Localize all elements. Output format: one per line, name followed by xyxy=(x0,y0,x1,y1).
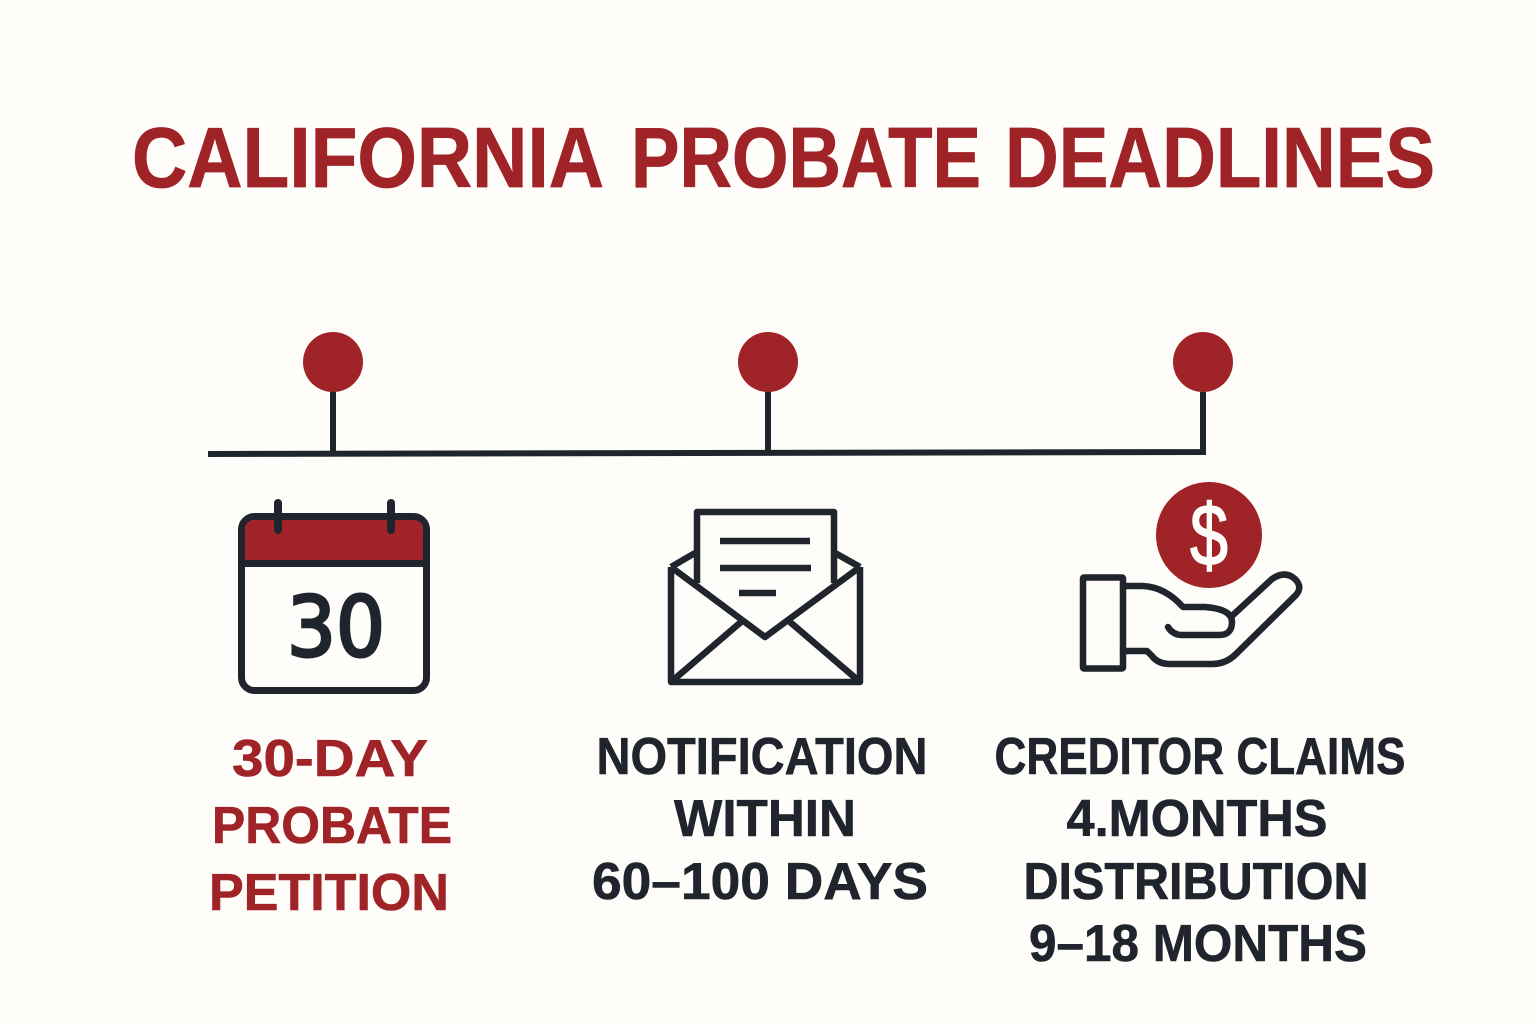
label: notification within 60-100 days: NOTIFICATION xyxy=(596,728,928,786)
icon: hand with dollar coin xyxy=(1083,482,1299,668)
icon: calendar xyxy=(241,503,427,690)
label: creditor claims and distribution: 4.MONTHS xyxy=(1066,790,1328,848)
label: creditor claims and distribution: 9–18 MONTHS xyxy=(1029,915,1367,973)
timeline xyxy=(208,332,1233,454)
milestone pin 3 xyxy=(1173,332,1233,392)
milestone pin 2 xyxy=(738,332,798,453)
title: PROBATE xyxy=(631,111,981,206)
coin xyxy=(1156,482,1262,588)
icon: calendar: 30 xyxy=(287,579,385,676)
label: creditor claims and distribution: DISTRIBUTION xyxy=(1024,853,1368,911)
label: 30-day probate petition: 30-DAY xyxy=(232,730,428,788)
label: 30-day probate petition xyxy=(209,730,452,922)
label: creditor claims and distribution xyxy=(994,728,1406,973)
coin: $ xyxy=(1190,487,1228,584)
title: DEADLINES xyxy=(1005,111,1435,206)
label: 30-day probate petition: PROBATE xyxy=(212,797,452,855)
title xyxy=(132,111,1435,206)
milestone pin 1 xyxy=(303,332,363,454)
label: creditor claims and distribution: CREDITOR CLAIMS xyxy=(994,728,1406,786)
timeline axis xyxy=(208,392,1203,454)
hand xyxy=(1083,574,1299,668)
label: notification within 60-100 days: WITHIN xyxy=(674,790,856,848)
label: 30-day probate petition: PETITION xyxy=(209,864,449,922)
icon: envelope with letter xyxy=(671,512,860,682)
label: notification within 60-100 days xyxy=(592,728,928,911)
title: CALIFORNIA xyxy=(132,111,604,206)
label: notification within 60-100 days: 60–100 DAYS xyxy=(592,853,928,911)
